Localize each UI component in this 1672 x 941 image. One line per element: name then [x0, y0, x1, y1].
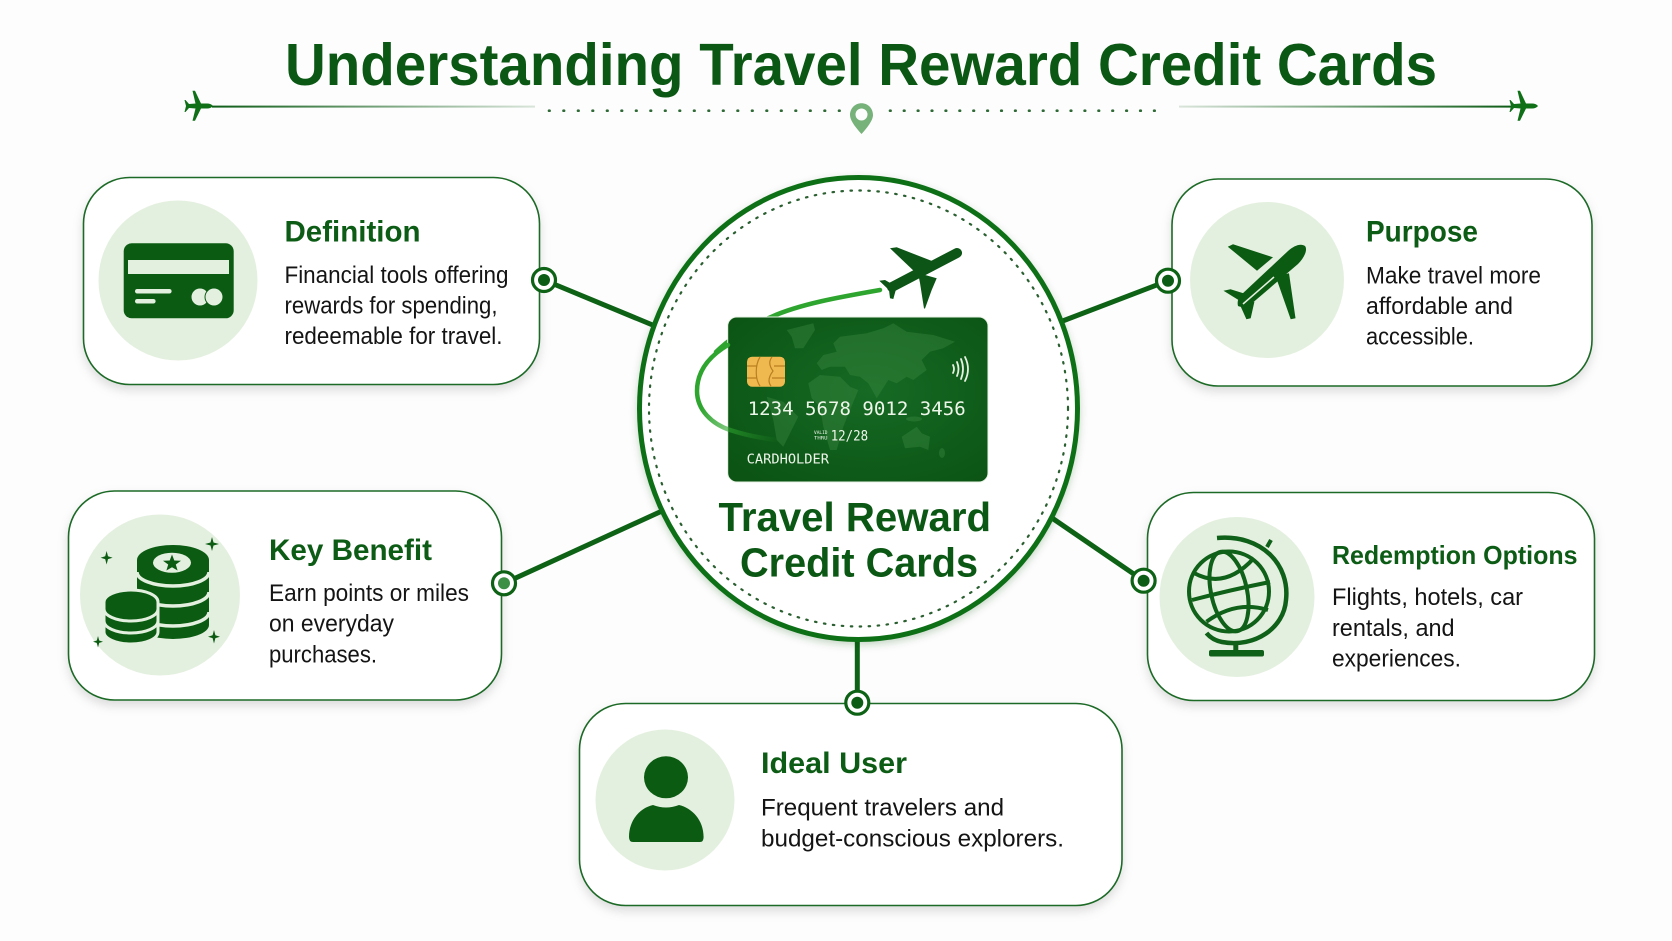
- card outline: [1148, 492, 1594, 700]
- panel: purpose: [1172, 179, 1592, 386]
- body text: rewards for spending,: [284, 292, 498, 319]
- node: purpose: [1156, 269, 1180, 292]
- panel: key benefit: [68, 491, 502, 700]
- heading: Purpose: [1366, 216, 1478, 249]
- hub title: [718, 494, 991, 586]
- hub title: Credit Cards: [740, 540, 978, 586]
- body text: Frequent travelers and: [761, 795, 1004, 822]
- body text: Flights, hotels, car: [1332, 584, 1523, 611]
- body text: [1366, 262, 1541, 351]
- hub outer ring: [640, 178, 1078, 640]
- icon: globe: [1189, 538, 1286, 656]
- body text: purchases.: [269, 641, 377, 668]
- icon disc: [1190, 202, 1344, 358]
- dotted route left: [549, 109, 846, 112]
- panel: definition: [84, 178, 540, 384]
- heading: Key Benefit: [269, 534, 432, 567]
- node: redemption options: [1132, 569, 1155, 592]
- hub title: Travel Reward: [718, 494, 991, 540]
- connectors: [504, 280, 1168, 703]
- credit card illustration: [728, 317, 988, 482]
- panel: redemption options: [1148, 492, 1594, 700]
- icon: left airplane: [184, 91, 213, 121]
- icon: airplane: [1224, 244, 1306, 319]
- icon disc: [80, 514, 240, 676]
- central hub: [640, 178, 1078, 640]
- body text: [269, 580, 469, 668]
- body text: accessible.: [1366, 324, 1474, 351]
- node: key benefit: [492, 572, 516, 595]
- heading: Ideal User: [761, 747, 907, 780]
- icon disc: [596, 730, 734, 870]
- valid thru label: THRU: [814, 436, 828, 442]
- node: ideal user: [846, 691, 869, 714]
- node: definition: [532, 268, 556, 292]
- body text: Earn points or miles: [269, 580, 469, 607]
- icon: location pin: [850, 103, 873, 134]
- card outline: [580, 704, 1122, 906]
- heading: Definition: [284, 216, 420, 249]
- world map: [767, 323, 955, 458]
- title divider: [184, 91, 1538, 134]
- body text: Make travel more: [1366, 262, 1541, 289]
- dotted route right: [890, 109, 1168, 112]
- valid thru label: VALID: [814, 430, 828, 436]
- body text: budget-conscious explorers.: [761, 826, 1064, 853]
- card outline: [68, 491, 502, 700]
- expiry date: 12/28: [831, 429, 868, 445]
- card outline: [1172, 179, 1592, 386]
- body text: redeemable for travel.: [284, 323, 502, 350]
- body text: [761, 795, 1064, 853]
- left flight line: [212, 106, 535, 108]
- card body: [728, 317, 988, 482]
- right flight line: [1179, 106, 1512, 108]
- icon disc: [98, 200, 258, 360]
- title: Understanding Travel Reward Credit Cards: [285, 32, 1437, 98]
- flight trail behind card: [716, 290, 880, 352]
- body text: on everyday: [269, 611, 394, 638]
- icon: airplane over card: [879, 247, 957, 308]
- hub dotted ring: [649, 190, 1068, 626]
- body text: experiences.: [1332, 646, 1461, 673]
- cardholder: CARDHOLDER: [747, 452, 829, 467]
- panel: ideal user: [580, 704, 1122, 906]
- icon: right airplane: [1510, 91, 1538, 121]
- body text: rentals, and: [1332, 615, 1455, 642]
- body text: [284, 262, 508, 350]
- valid thru label: [814, 430, 828, 442]
- chip: [747, 357, 785, 387]
- body text: Financial tools offering: [284, 262, 508, 289]
- icon disc: [1160, 517, 1314, 677]
- icon: coins: [93, 537, 220, 648]
- card outline: [84, 178, 540, 384]
- icon: credit card: [124, 243, 234, 318]
- contactless icon: [953, 357, 968, 381]
- icon: person: [629, 756, 704, 842]
- body text: affordable and: [1366, 293, 1513, 320]
- heading: Redemption Options: [1332, 540, 1578, 570]
- body text: [1332, 584, 1523, 673]
- card number: 1234 5678 9012 3456: [748, 398, 966, 420]
- flight trail in front of card: [697, 345, 777, 440]
